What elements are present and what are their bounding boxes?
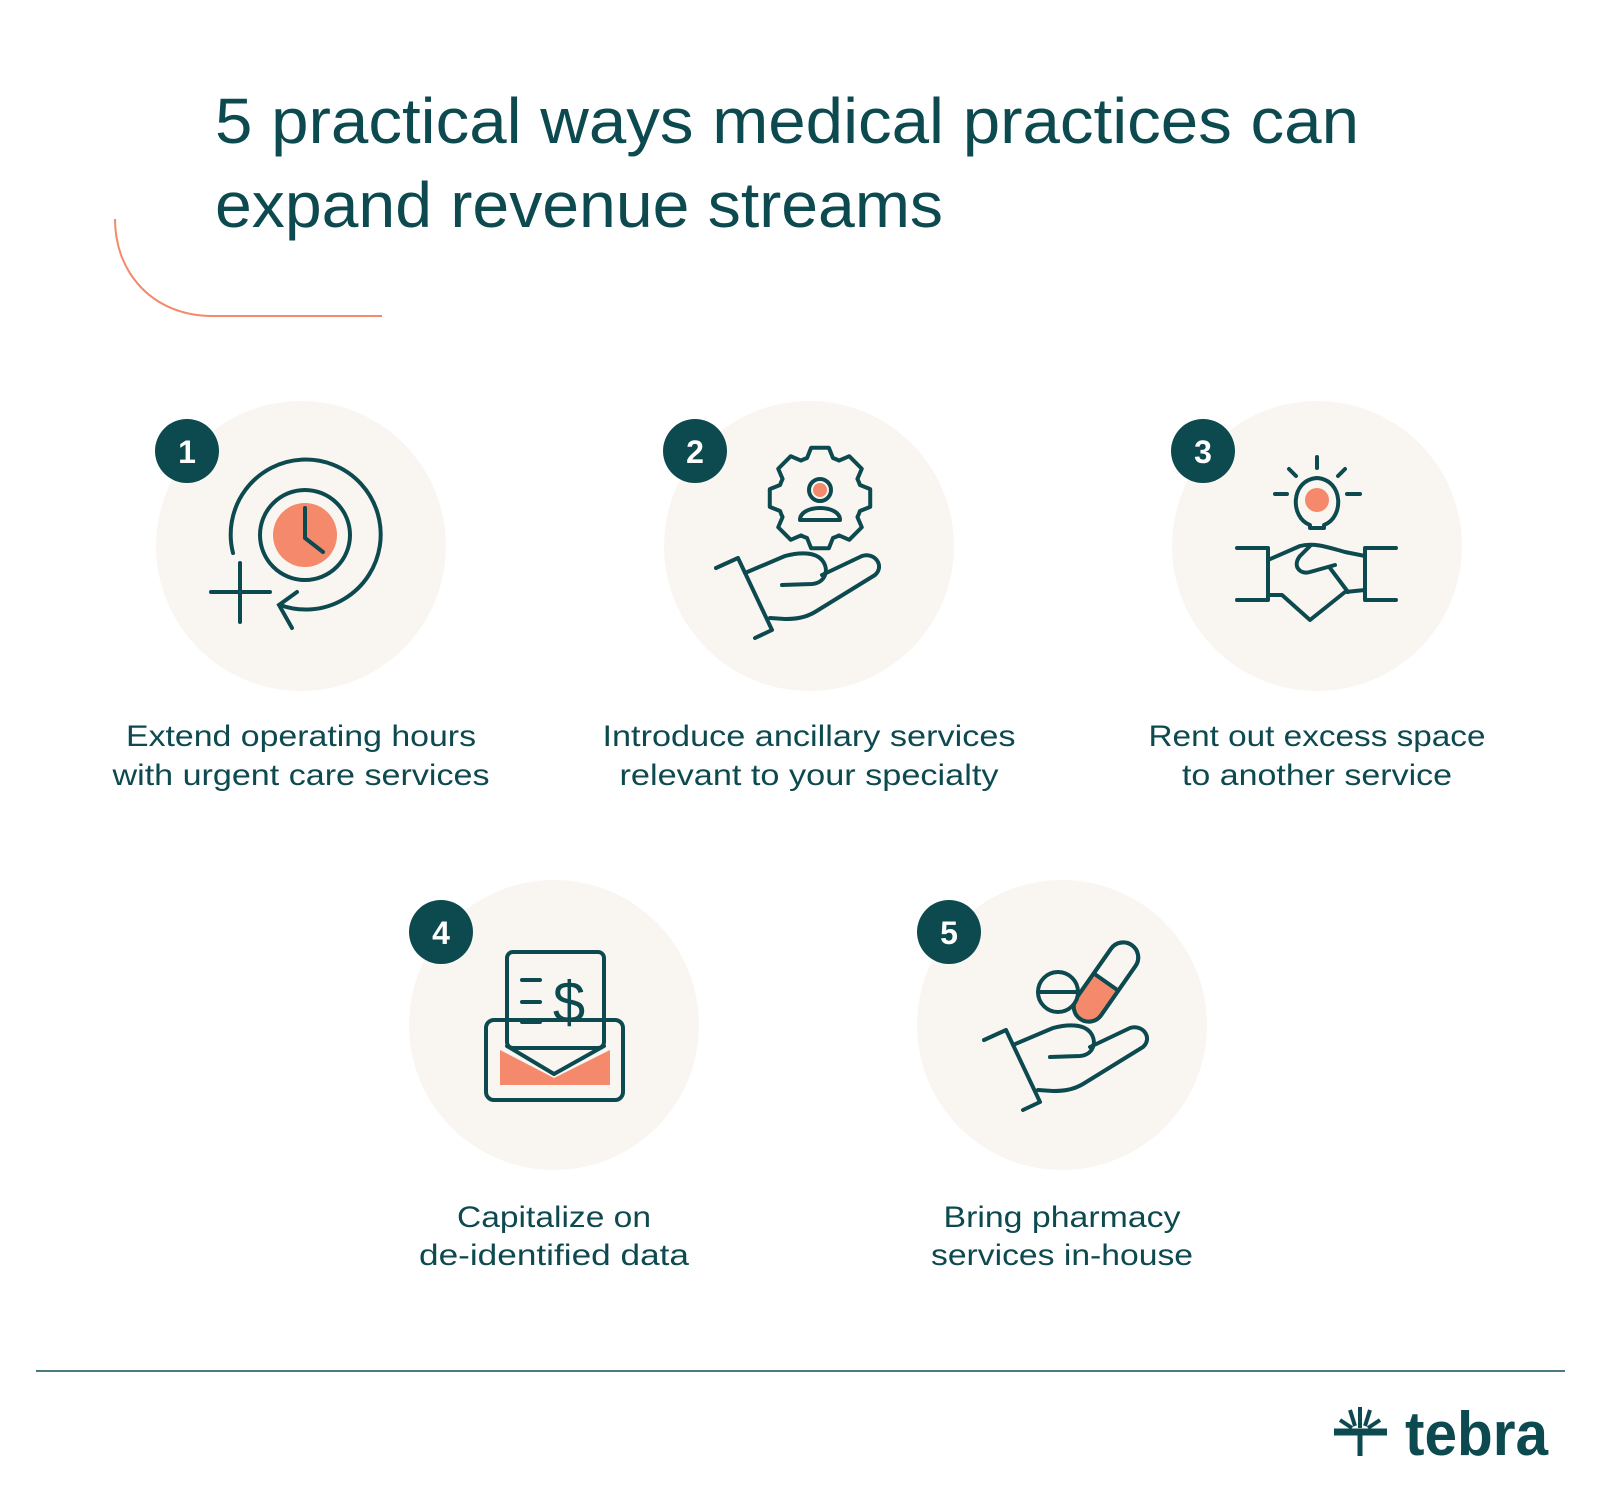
panel: item 4 xyxy=(409,880,699,1272)
icon: lightbulb and handshake xyxy=(1237,457,1396,620)
title: expand revenue streams xyxy=(215,169,943,241)
badge 3: 3 xyxy=(1194,434,1212,470)
title xyxy=(215,85,1359,241)
panel: item 2 xyxy=(602,401,1016,792)
badge 2: 2 xyxy=(686,434,704,470)
icon: clock with arrow xyxy=(211,460,381,628)
caption 1: with urgent care services xyxy=(111,759,489,792)
badge 1 xyxy=(155,419,219,483)
caption 5: Bring pharmacy xyxy=(944,1201,1180,1234)
logo: tebra: tebra xyxy=(1405,1400,1548,1469)
badge 5 xyxy=(917,900,981,964)
caption 4: de-identified data xyxy=(419,1239,689,1272)
badge 4 xyxy=(409,900,473,964)
panel: item 3 xyxy=(1148,401,1486,792)
divider xyxy=(36,1370,1565,1372)
caption 5: services in-house xyxy=(931,1239,1193,1272)
icon: envelope with invoice xyxy=(486,952,623,1100)
caption 2: relevant to your specialty xyxy=(620,759,998,792)
badge 2 xyxy=(663,419,727,483)
caption 4: Capitalize on xyxy=(457,1201,651,1234)
caption 4 xyxy=(419,1201,689,1272)
caption 2 xyxy=(602,720,1016,792)
caption 2: Introduce ancillary services xyxy=(602,720,1016,753)
caption 3 xyxy=(1148,720,1486,792)
decorative orange arc xyxy=(115,219,382,316)
badge 3 xyxy=(1171,419,1235,483)
panel: item 5 xyxy=(917,880,1207,1272)
icon: gear with person over hand xyxy=(716,448,879,638)
icon: tebra mark xyxy=(1334,1407,1387,1456)
caption 3: to another service xyxy=(1182,759,1452,792)
caption 5 xyxy=(931,1201,1193,1272)
title: 5 practical ways medical practices can xyxy=(215,85,1359,157)
badge 1: 1 xyxy=(178,434,196,470)
caption 1: Extend operating hours xyxy=(126,720,476,753)
logo: tebra xyxy=(1334,1400,1548,1469)
panel: item 1 xyxy=(111,401,489,792)
badge 4: 4 xyxy=(432,915,450,951)
badge 5: 5 xyxy=(940,915,958,951)
panel: item 4: $ xyxy=(553,970,585,1035)
icon: pills over hand xyxy=(984,937,1147,1110)
caption 3: Rent out excess space xyxy=(1148,720,1486,753)
caption 1 xyxy=(111,720,489,792)
